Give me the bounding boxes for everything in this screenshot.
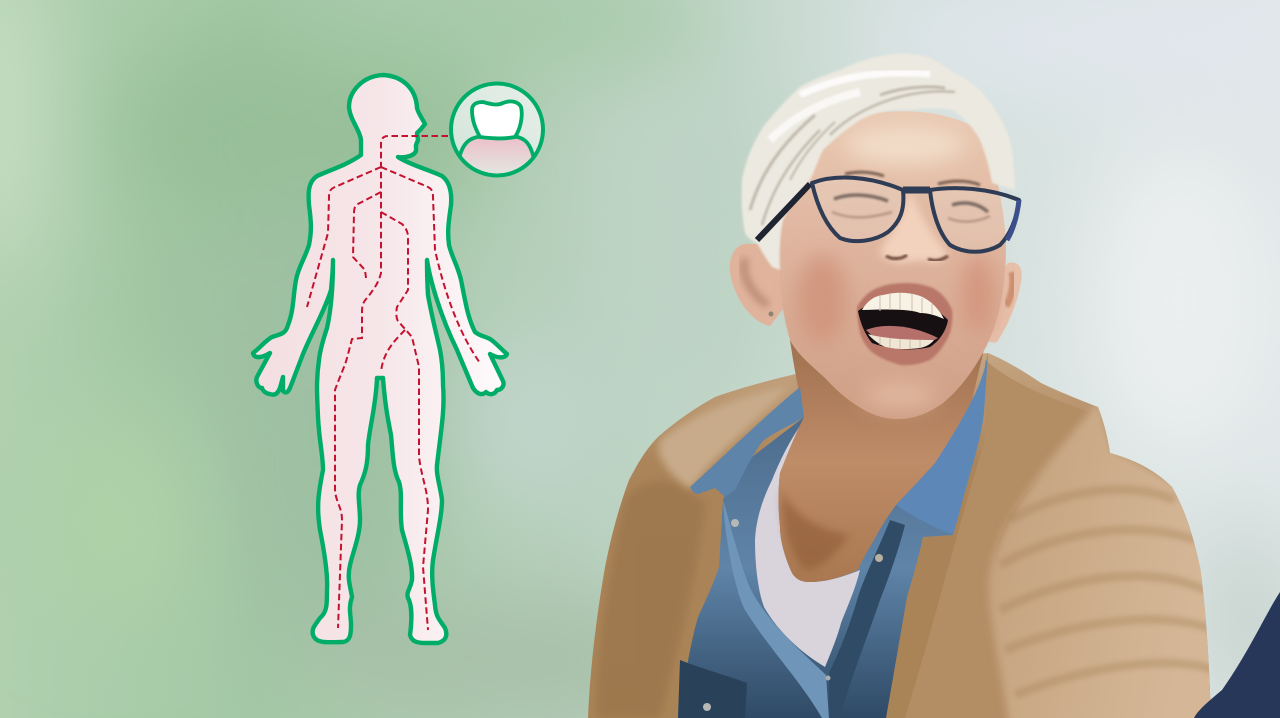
cheek shading [797, 125, 994, 407]
photo: laughing woman [588, 54, 1280, 718]
white t-shirt [755, 420, 860, 667]
glasses [757, 178, 1019, 252]
collarbone shadow [782, 490, 850, 570]
eyebrows and closed eyes [832, 172, 990, 222]
nose [880, 190, 948, 262]
sleeve knit bands [1000, 490, 1215, 695]
neck and chest [778, 340, 985, 582]
dark jacket corner [1194, 592, 1280, 718]
gum [459, 135, 534, 174]
circle ring [451, 84, 543, 176]
shirt buttons [731, 519, 739, 527]
human body diagram [253, 75, 507, 643]
tooth [472, 101, 522, 138]
nerve pathways [307, 136, 480, 630]
cardigan [588, 353, 1220, 718]
hair [742, 54, 1015, 270]
collar right [896, 353, 988, 535]
denim shirt [678, 417, 955, 718]
laughing mouth [857, 283, 952, 365]
face [780, 111, 1006, 419]
body outline [253, 75, 507, 643]
ears [730, 244, 1022, 343]
collar left [690, 387, 804, 497]
icon: tooth in circle [451, 84, 543, 190]
